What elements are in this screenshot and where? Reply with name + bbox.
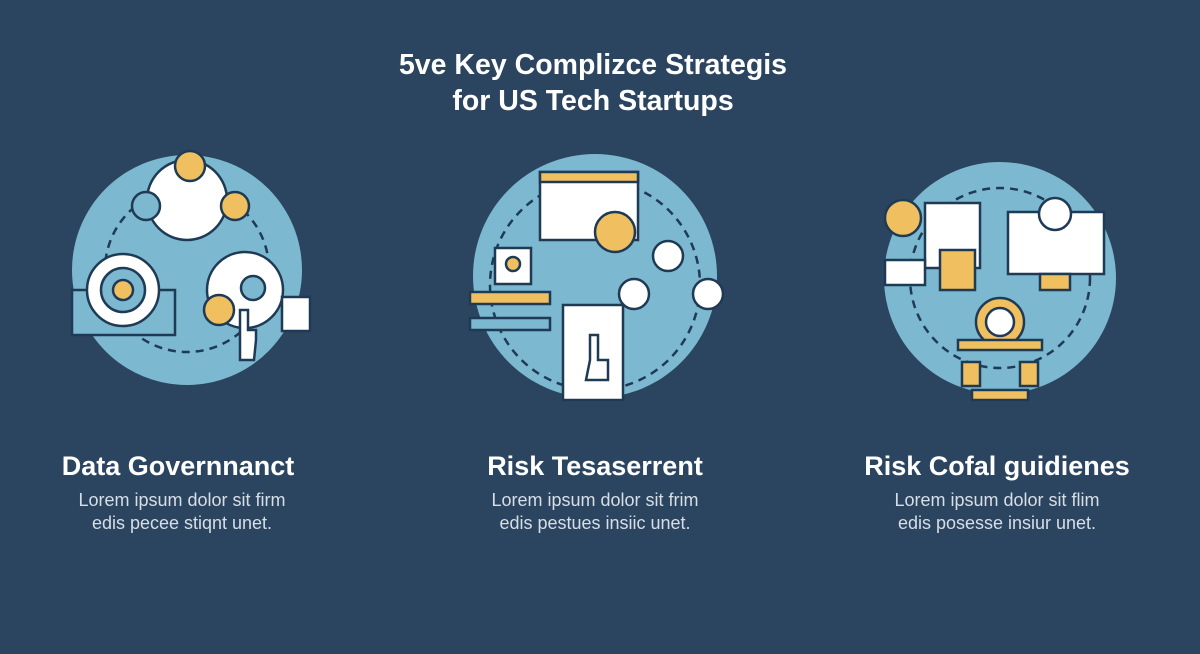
text: risk assessment — [491, 490, 699, 533]
text: data governance: edis pecee stiqnt unet. — [92, 513, 272, 533]
heading: risk control: Risk Cofal guidienes — [864, 451, 1130, 481]
icon: risk control — [884, 162, 1116, 400]
text: data governance — [78, 490, 286, 533]
heading: risk assessment: Risk Tesaserrent — [487, 451, 703, 481]
icon: data governance — [72, 151, 310, 385]
title: 5ve Key Complizce Strategis — [399, 49, 787, 81]
heading: data governance: Data Governnanct — [62, 451, 294, 481]
text: risk control: edis posesse insiur unet. — [898, 513, 1096, 533]
text: data governance: Lorem ipsum dolor sit firm — [78, 490, 286, 510]
text: risk assessment: edis pestues insiic unet. — [499, 513, 691, 533]
text: risk control — [894, 490, 1100, 533]
title — [399, 49, 787, 117]
text: risk control: Lorem ipsum dolor sit flim — [894, 490, 1100, 510]
icon: risk assessment — [470, 154, 723, 400]
text: risk assessment: Lorem ipsum dolor sit frim — [491, 490, 699, 510]
title: for US Tech Startups — [452, 85, 734, 117]
